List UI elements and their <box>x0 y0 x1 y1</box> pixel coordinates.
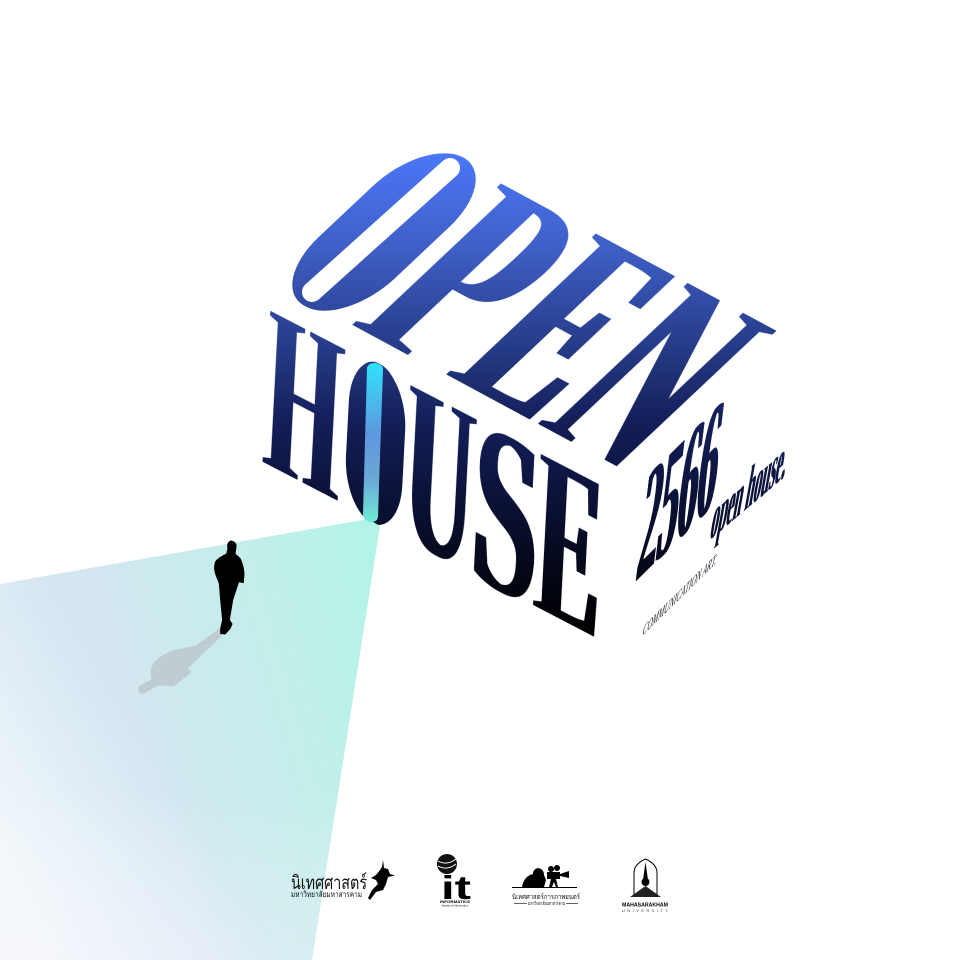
letter O: O <box>338 293 414 588</box>
logo: informatics <box>437 854 471 908</box>
heading: OPEN on the top face <box>215 85 833 521</box>
logo university line: มหาวิทยาลัยมหาสารคาม <box>528 900 565 907</box>
icon: seal <box>630 859 661 897</box>
letter U: U <box>400 327 480 624</box>
logo wordmark: นิเทศศาสตร์ <box>291 872 367 894</box>
caption: COMMUNICATION ART.: COMMUNICATION ART. <box>641 549 719 640</box>
logo rule <box>512 887 577 888</box>
letter E: E <box>531 397 608 692</box>
light beam <box>0 519 380 960</box>
year 2566: 2566 <box>631 359 731 619</box>
letter O: O <box>215 85 558 374</box>
heading: HOUSE on the left face <box>260 253 608 692</box>
letter E: E <box>393 181 741 473</box>
icon: cameraman <box>522 865 569 887</box>
shadow of the walker <box>140 630 221 693</box>
caption: open house.: open house. <box>706 417 795 556</box>
letter H: H <box>260 253 348 554</box>
walking person silhouette <box>215 541 244 634</box>
icon: globe <box>437 854 457 874</box>
logo: Mahasarakham University <box>622 859 668 913</box>
it letters: it <box>441 869 471 906</box>
letter O counter <box>312 168 450 292</box>
logo wordmark: นิเทศศาสตร์การภาพยนตร์ <box>512 893 580 901</box>
icon: leaping figure <box>368 860 395 900</box>
year and captions on the right face <box>631 359 795 640</box>
UNIVERSITY label: UNIVERSITY <box>622 909 668 913</box>
MAHASARAKHAM label: MAHASARAKHAM <box>622 902 668 908</box>
logo: film school <box>512 865 580 907</box>
logo university line: มหาวิทยาลัยมหาสารคาม <box>291 890 362 899</box>
letter S: S <box>467 365 545 661</box>
INFORMATICS label: INFORMATICS <box>440 900 471 904</box>
faculty label: faculty of informatics <box>442 904 468 908</box>
door slit of light in the O <box>363 363 383 522</box>
letter N: N <box>485 229 833 521</box>
logo: communication arts faculty <box>291 860 395 900</box>
letter P: P <box>298 130 648 423</box>
